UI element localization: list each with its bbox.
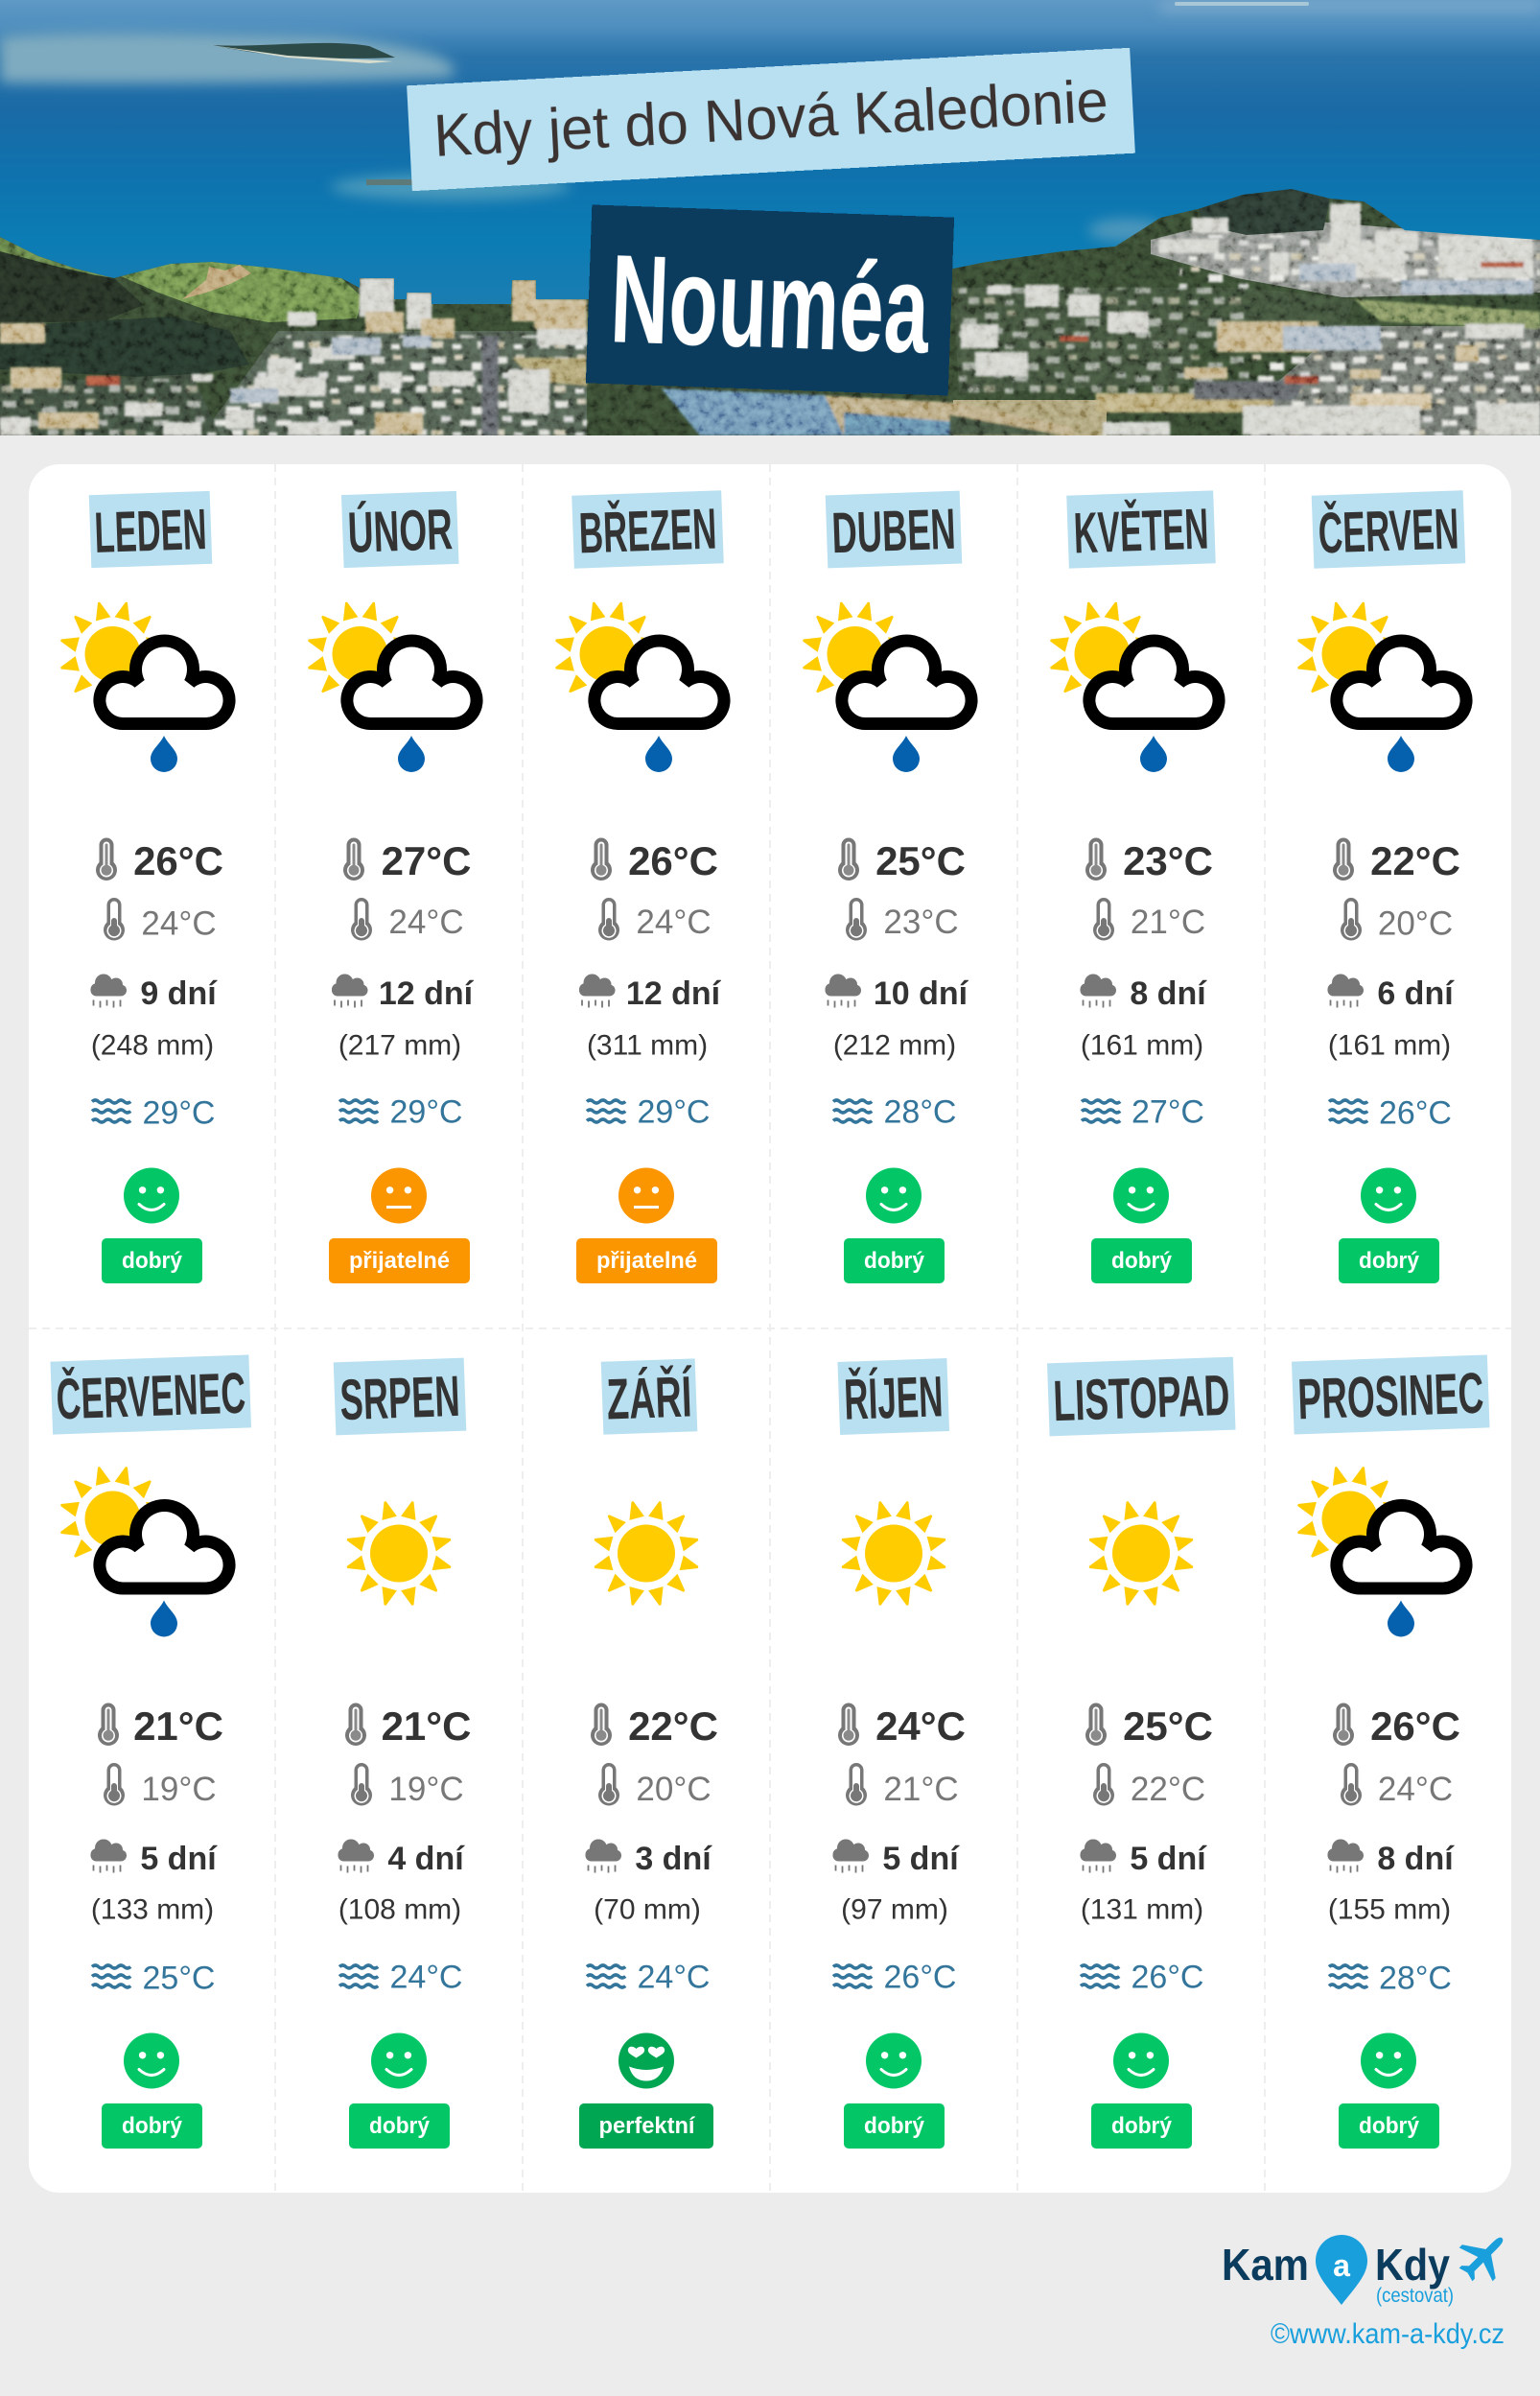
rating badge: dobrý bbox=[369, 2113, 431, 2139]
rating badge bbox=[329, 1238, 470, 1283]
heading: ZÁŘÍ bbox=[606, 1364, 693, 1432]
max temperature bbox=[1333, 838, 1460, 883]
rating badge: přijatelné bbox=[349, 1248, 450, 1274]
min temperature: 24°C bbox=[1378, 1771, 1453, 1808]
rainy days: 8 dní bbox=[1377, 1841, 1455, 1877]
icon: sun, cloud and rain bbox=[1295, 600, 1466, 772]
rating badge: dobrý bbox=[864, 1248, 925, 1274]
rainy days: 5 dní bbox=[1130, 1841, 1207, 1877]
icon: heart-eyes face bbox=[618, 2033, 674, 2089]
min temperature bbox=[1093, 1763, 1205, 1808]
icon: smile bbox=[124, 2033, 179, 2089]
min temperature: 24°C bbox=[388, 904, 464, 941]
heading: ŘÍJEN bbox=[843, 1364, 944, 1432]
rainy days: 10 dní bbox=[874, 975, 969, 1012]
sea temperature: 24°C bbox=[390, 1959, 462, 1995]
rainy days: 4 dní bbox=[387, 1841, 465, 1877]
rainy days bbox=[1080, 1840, 1207, 1877]
sea temperature bbox=[339, 1959, 462, 1995]
rainy days: 8 dní bbox=[1130, 975, 1207, 1012]
rainfall: (217 mm) bbox=[338, 1030, 461, 1061]
rainfall: (133 mm) bbox=[91, 1893, 214, 1926]
heading: KVĚTEN bbox=[1073, 497, 1209, 565]
rainy days bbox=[585, 1840, 712, 1877]
max temperature bbox=[1333, 1703, 1460, 1749]
rating badge: dobrý bbox=[864, 2113, 925, 2139]
heading: SRPEN bbox=[338, 1364, 461, 1432]
min temperature bbox=[104, 898, 217, 942]
min temperature bbox=[351, 898, 464, 941]
heading bbox=[837, 1358, 949, 1435]
heading: ČERVENEC bbox=[55, 1361, 246, 1431]
max temperature: 25°C bbox=[1123, 1703, 1213, 1749]
rainy days bbox=[825, 975, 969, 1012]
rainy days: 9 dní bbox=[140, 975, 218, 1012]
heading bbox=[50, 1354, 251, 1435]
title band: Kdy jet do Nová Kaledonie: Kdy jet do Nová Kaledonie bbox=[432, 68, 1109, 170]
sea temperature: 26°C bbox=[884, 1959, 956, 1995]
min temperature bbox=[104, 1763, 217, 1808]
icon: sun, cloud and rain bbox=[58, 1465, 229, 1636]
rainy days bbox=[1080, 975, 1207, 1012]
heading bbox=[334, 1358, 466, 1435]
max temperature bbox=[591, 838, 718, 883]
sea temperature bbox=[1329, 1095, 1452, 1132]
min temperature: 21°C bbox=[883, 1771, 959, 1808]
max temperature: 21°C bbox=[133, 1703, 223, 1749]
rainy days bbox=[1327, 1840, 1455, 1877]
rating badge bbox=[1091, 1238, 1192, 1283]
rainfall: (131 mm) bbox=[1081, 1893, 1203, 1926]
title band: Kdy jet do Nová Kaledonie bbox=[407, 48, 1135, 191]
heading bbox=[601, 1358, 697, 1435]
icon: sun, cloud and rain bbox=[58, 600, 229, 772]
rainy days bbox=[90, 1840, 218, 1877]
sea temperature: 28°C bbox=[884, 1093, 956, 1130]
rating badge: dobrý bbox=[1111, 1248, 1173, 1274]
heading: BŘEZEN bbox=[578, 497, 717, 565]
min temperature: 22°C bbox=[1131, 1771, 1205, 1808]
icon: smile bbox=[1361, 1168, 1416, 1224]
icon: sun, cloud and rain bbox=[1295, 1465, 1466, 1636]
rainfall: (161 mm) bbox=[1328, 1030, 1451, 1061]
max temperature: 24°C bbox=[875, 1703, 966, 1749]
icon: sun, cloud and rain bbox=[306, 600, 477, 772]
sea temperature: 26°C bbox=[1379, 1095, 1452, 1132]
rating badge bbox=[576, 1238, 717, 1283]
icon: airplane bbox=[1449, 2221, 1519, 2291]
min temperature bbox=[351, 1763, 464, 1808]
max temperature bbox=[1085, 1703, 1213, 1749]
max temperature: 27°C bbox=[382, 838, 471, 883]
min temperature: 23°C bbox=[883, 904, 959, 941]
rating badge bbox=[844, 1238, 945, 1283]
rainy days: 12 dní bbox=[379, 975, 475, 1012]
rainfall: (108 mm) bbox=[338, 1893, 461, 1926]
icon: smile bbox=[1361, 2033, 1416, 2089]
min temperature: 24°C bbox=[636, 904, 712, 941]
month: Říjen bbox=[832, 1358, 966, 2149]
month: Červen bbox=[1295, 490, 1466, 1283]
rating badge: přijatelné bbox=[596, 1248, 697, 1274]
max temperature: 22°C bbox=[1370, 838, 1460, 883]
max temperature bbox=[591, 1703, 718, 1749]
heading bbox=[341, 491, 459, 568]
sea temperature: 24°C bbox=[638, 1959, 710, 1995]
rainy days: 12 dní bbox=[626, 975, 722, 1012]
max temperature: 25°C bbox=[875, 838, 966, 883]
icon: smile bbox=[371, 2033, 427, 2089]
month: Listopad bbox=[1047, 1357, 1236, 2149]
rainy days: 5 dní bbox=[882, 1841, 960, 1877]
sea temperature bbox=[339, 1093, 462, 1130]
month: Březen bbox=[553, 490, 724, 1283]
icon: smile bbox=[866, 1168, 922, 1224]
sea temperature bbox=[92, 1961, 215, 1997]
logo tagline: (cestovat) bbox=[1376, 2285, 1454, 2307]
month: Duben bbox=[801, 491, 971, 1283]
sea temperature: 29°C bbox=[390, 1093, 462, 1130]
min temperature: 20°C bbox=[1378, 905, 1453, 942]
rainfall: (161 mm) bbox=[1081, 1030, 1203, 1061]
rainy days bbox=[338, 1840, 465, 1877]
sea temperature bbox=[587, 1959, 710, 1995]
logo word: Kdy: Kdy bbox=[1375, 2240, 1450, 2290]
rainy days bbox=[579, 975, 722, 1012]
rainy days bbox=[832, 1840, 960, 1877]
rainfall: (311 mm) bbox=[587, 1030, 708, 1061]
sea temperature bbox=[587, 1093, 710, 1130]
rating badge: dobrý bbox=[122, 1248, 183, 1274]
month: Září bbox=[579, 1358, 718, 2149]
icon: map pin with a bbox=[1316, 2235, 1367, 2305]
min temperature bbox=[846, 1763, 959, 1808]
sea temperature bbox=[833, 1959, 956, 1995]
min temperature: 24°C bbox=[141, 905, 217, 942]
min temperature bbox=[1341, 898, 1453, 942]
icon: sun, cloud and rain bbox=[1048, 600, 1219, 772]
sea temperature: 27°C bbox=[1132, 1093, 1204, 1130]
sea temperature: 29°C bbox=[638, 1093, 710, 1130]
heading bbox=[1312, 490, 1465, 569]
sea temperature bbox=[1082, 1093, 1204, 1130]
rating badge bbox=[579, 2103, 713, 2149]
sea temperature: 26°C bbox=[1132, 1959, 1203, 1995]
heading bbox=[1066, 490, 1216, 569]
min temperature bbox=[846, 898, 959, 941]
month: Srpen bbox=[334, 1358, 471, 2149]
heading: LEDEN bbox=[93, 497, 208, 565]
heading: LISTOPAD bbox=[1052, 1363, 1230, 1433]
rainfall: (70 mm) bbox=[594, 1893, 701, 1926]
rating badge bbox=[349, 2103, 450, 2149]
rainfall: (97 mm) bbox=[841, 1893, 948, 1926]
rainy days bbox=[90, 975, 218, 1012]
sea temperature: 28°C bbox=[1379, 1961, 1452, 1997]
rating badge: dobrý bbox=[1359, 1248, 1420, 1274]
heading bbox=[826, 491, 962, 568]
rating badge bbox=[1339, 2103, 1439, 2149]
rainfall: (155 mm) bbox=[1328, 1893, 1451, 1926]
icon: sun, cloud and rain bbox=[553, 600, 724, 772]
rating badge bbox=[844, 2103, 945, 2149]
month: Prosinec bbox=[1292, 1354, 1490, 2149]
max temperature: 26°C bbox=[628, 838, 718, 883]
month: Leden bbox=[58, 491, 229, 1283]
icon: sun bbox=[1087, 1499, 1195, 1608]
heading bbox=[572, 490, 724, 569]
max temperature: 22°C bbox=[628, 1703, 718, 1749]
rating badge: dobrý bbox=[122, 2113, 183, 2139]
icon: map pin with a: a bbox=[1333, 2248, 1350, 2283]
month: Květen bbox=[1048, 490, 1219, 1283]
min temperature bbox=[598, 1763, 712, 1808]
max temperature: 21°C bbox=[382, 1703, 471, 1749]
min temperature bbox=[1341, 1763, 1453, 1808]
title box: Nouméa bbox=[586, 204, 954, 396]
icon: neutral face bbox=[371, 1168, 427, 1224]
icon: smile bbox=[866, 2033, 922, 2089]
rainfall: (212 mm) bbox=[833, 1030, 956, 1061]
min temperature bbox=[1093, 898, 1205, 941]
icon: sun bbox=[840, 1499, 947, 1608]
icon: smile bbox=[1113, 2033, 1169, 2089]
icon: sun, cloud and rain bbox=[801, 600, 971, 772]
rainy days: 5 dní bbox=[140, 1841, 218, 1877]
max temperature bbox=[1085, 838, 1213, 883]
rainy days bbox=[1327, 975, 1455, 1012]
sea temperature bbox=[1329, 1961, 1452, 1997]
month: Únor bbox=[306, 491, 477, 1283]
sea temperature bbox=[92, 1095, 215, 1132]
rating badge bbox=[1339, 1238, 1439, 1283]
white months panel bbox=[29, 464, 1511, 2193]
icon: neutral face bbox=[618, 1168, 674, 1224]
rating badge bbox=[102, 1238, 202, 1283]
max temperature: 26°C bbox=[133, 838, 223, 883]
max temperature bbox=[96, 838, 223, 883]
sea temperature: 25°C bbox=[143, 1961, 215, 1997]
heading bbox=[1047, 1357, 1236, 1436]
rating badge bbox=[1091, 2103, 1192, 2149]
max temperature: 23°C bbox=[1123, 838, 1213, 883]
sea temperature bbox=[833, 1093, 956, 1130]
min temperature: 19°C bbox=[388, 1771, 464, 1808]
icon: smile bbox=[124, 1168, 179, 1224]
rainy days bbox=[332, 975, 475, 1012]
heading bbox=[89, 491, 212, 568]
icon: smile bbox=[1113, 1168, 1169, 1224]
sea temperature bbox=[1081, 1959, 1203, 1995]
heading: ÚNOR bbox=[347, 497, 454, 565]
max temperature bbox=[838, 1703, 966, 1749]
header photo: bay of Nouméa bbox=[0, 0, 1540, 435]
icon: sun bbox=[345, 1499, 453, 1608]
website url: ©www.kam-a-kdy.cz bbox=[1271, 2318, 1505, 2350]
max temperature bbox=[343, 838, 471, 883]
rating badge: dobrý bbox=[1359, 2113, 1420, 2139]
sea temperature: 29°C bbox=[143, 1095, 215, 1132]
rainy days: 6 dní bbox=[1377, 975, 1455, 1012]
title box: Nouméa: Nouméa bbox=[608, 227, 932, 380]
max temperature bbox=[838, 838, 966, 883]
month: Červenec bbox=[50, 1354, 251, 2149]
min temperature: 20°C bbox=[636, 1771, 712, 1808]
rating badge: dobrý bbox=[1111, 2113, 1173, 2139]
min temperature: 21°C bbox=[1131, 904, 1205, 941]
rating badge: perfektní bbox=[598, 2113, 696, 2139]
min temperature bbox=[598, 898, 712, 941]
icon: sun bbox=[593, 1499, 700, 1608]
max temperature: 26°C bbox=[1370, 1703, 1460, 1749]
min temperature: 19°C bbox=[141, 1771, 217, 1808]
logo: Kam a Kdy (cestovat) bbox=[1222, 2221, 1519, 2307]
rating badge bbox=[102, 2103, 202, 2149]
rainy days: 3 dní bbox=[635, 1841, 712, 1877]
rainfall: (248 mm) bbox=[91, 1030, 214, 1061]
logo word: Kam: Kam bbox=[1222, 2240, 1309, 2290]
heading: DUBEN bbox=[830, 497, 957, 565]
